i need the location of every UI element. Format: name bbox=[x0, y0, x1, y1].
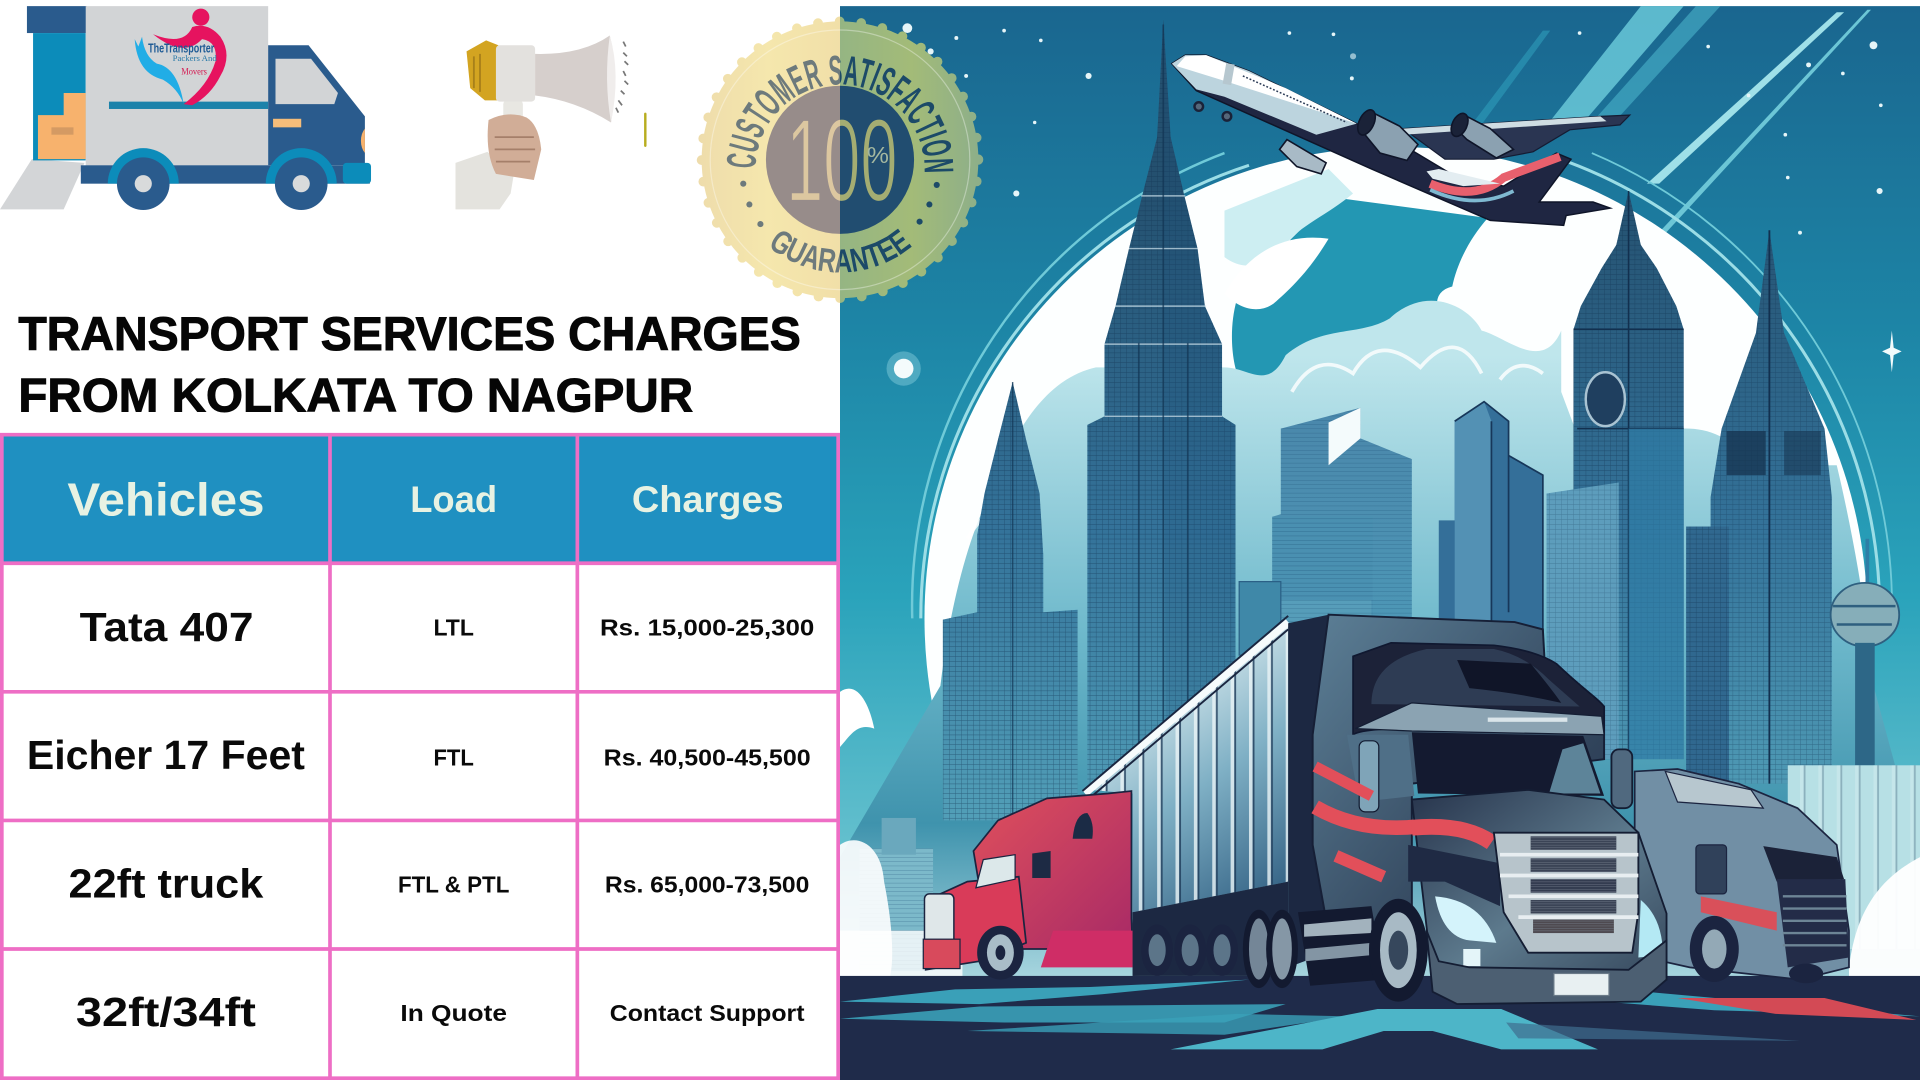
row: 22ft truck: FTL & PTL bbox=[398, 872, 509, 898]
row: Tata 407 bbox=[80, 604, 814, 650]
mid twin glass tower bbox=[1439, 402, 1543, 686]
ground bbox=[840, 976, 1920, 1080]
airplane bbox=[1172, 55, 1630, 225]
row: 32ft/34ft: 32ft/34ft bbox=[76, 989, 256, 1035]
title: TRANSPORT SERVICES CHARGES bbox=[18, 307, 801, 360]
panel: illustration of city, plane and trucks bbox=[840, 6, 1920, 1080]
logo: The Transporter Packers And Movers: Packers And bbox=[173, 53, 217, 63]
haze lower backdrop with cloud outline bbox=[840, 301, 1920, 980]
globe arcs bbox=[912, 153, 1892, 618]
cloud highlight strokes bbox=[967, 347, 1543, 539]
right steeple tower bbox=[1686, 230, 1832, 784]
row: Eicher 17 Feet: Eicher 17 Feet bbox=[27, 732, 305, 778]
pricing table bbox=[2, 435, 838, 1078]
red truck wheels bbox=[977, 924, 1238, 980]
plane fuselage bbox=[1172, 55, 1610, 225]
large white globe bbox=[924, 147, 1867, 1080]
row: 22ft truck bbox=[69, 861, 809, 907]
table header row: Load bbox=[410, 479, 497, 520]
table grid lines bbox=[2, 435, 838, 1078]
central spire tower bbox=[1087, 20, 1236, 784]
row: Eicher 17 Feet bbox=[27, 732, 811, 778]
glowing moon orb bbox=[887, 351, 921, 386]
main truck trailer bbox=[1082, 615, 1353, 976]
light beams bbox=[1408, 6, 1871, 239]
table header row bbox=[2, 435, 838, 563]
white cloud wisps bbox=[1224, 169, 1353, 265]
distant globe tower bbox=[1831, 539, 1899, 765]
row: 32ft/34ft: In Quote bbox=[400, 1000, 507, 1026]
main truck wheels bbox=[1243, 899, 1428, 1002]
badge: customer satisfaction guarantee seal bbox=[696, 16, 984, 303]
row: 32ft/34ft bbox=[76, 989, 805, 1035]
mirror bbox=[1611, 749, 1632, 808]
table header row: Vehicles bbox=[67, 474, 264, 526]
main truck bumper bbox=[1427, 931, 1667, 1004]
left spire tower bbox=[943, 382, 1078, 820]
clock tower bbox=[1547, 191, 1684, 759]
main truck grille bbox=[1494, 833, 1638, 953]
logo: The Transporter Packers And Movers: TheTransporter bbox=[148, 41, 214, 56]
plane landing gear bbox=[1194, 102, 1231, 121]
badge: customer satisfaction guarantee seal: GUARANTEE bbox=[772, 228, 912, 272]
table header row: Charges bbox=[632, 479, 784, 520]
main truck cab bbox=[1313, 615, 1667, 980]
foreground glow clouds bbox=[840, 689, 1920, 982]
badge: customer satisfaction guarantee seal: CUSTOMER SATISFACTION bbox=[726, 56, 954, 172]
logo: The Transporter Packers And Movers: Movers bbox=[181, 67, 207, 77]
plane right wing bbox=[1403, 115, 1630, 159]
mid skyscraper block bbox=[1239, 408, 1412, 686]
main truck headlights bbox=[1435, 896, 1663, 966]
icon: delivery van with logo bbox=[0, 6, 371, 210]
teal sky gap inside globe bbox=[1232, 198, 1488, 398]
icon: megaphone held in hand bbox=[456, 36, 647, 209]
title bbox=[18, 307, 801, 421]
row: Tata 407: Tata 407 bbox=[80, 604, 253, 650]
stars bbox=[902, 23, 1883, 235]
logo: The Transporter Packers And Movers bbox=[135, 9, 227, 105]
row: Eicher 17 Feet: Rs. 40,500-45,500 bbox=[604, 744, 811, 770]
title: FROM KOLKATA TO NAGPUR bbox=[18, 368, 693, 421]
row: 32ft/34ft: Contact Support bbox=[610, 1000, 805, 1026]
plane tail stripe bbox=[1430, 157, 1560, 192]
row: 22ft truck: 22ft truck bbox=[69, 861, 264, 907]
sky background bbox=[840, 6, 1920, 1080]
grey right truck bbox=[1635, 769, 1849, 983]
pale foreground blocks bbox=[860, 765, 1920, 971]
row: Tata 407: Rs. 15,000-25,300 bbox=[600, 615, 814, 641]
row: 22ft truck: Rs. 65,000-73,500 bbox=[605, 872, 809, 898]
plane engines bbox=[1280, 107, 1513, 174]
white strip above illustration bbox=[0, 0, 840, 6]
sparkle bbox=[1882, 331, 1902, 372]
row: Tata 407: LTL bbox=[433, 615, 474, 641]
red truck bbox=[923, 791, 1267, 976]
badge: customer satisfaction guarantee seal: 100 bbox=[786, 95, 898, 226]
row: Eicher 17 Feet: FTL bbox=[433, 744, 474, 770]
badge: customer satisfaction guarantee seal: % bbox=[867, 142, 889, 168]
